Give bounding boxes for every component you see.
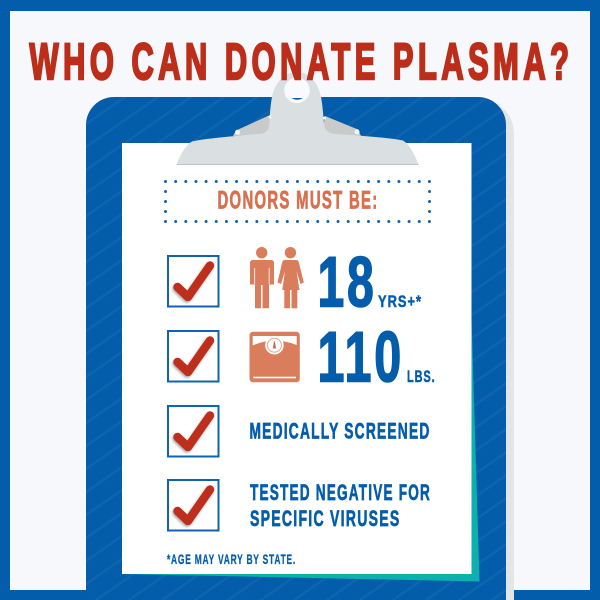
dotted heading box bbox=[166, 182, 430, 222]
checkbox 1 bbox=[168, 256, 218, 306]
clipboard shadow bbox=[496, 104, 514, 600]
text: tested negative: SPECIFIC VIRUSES bbox=[250, 506, 400, 531]
clip base edge bbox=[176, 164, 418, 165]
checkbox 3 bbox=[168, 406, 218, 456]
paper sheet bbox=[122, 143, 472, 574]
footnote: *AGE MAY VARY BY STATE. bbox=[167, 551, 296, 567]
label lbs: LBS. bbox=[407, 368, 436, 386]
clipboard board bbox=[86, 97, 506, 600]
text: tested negative bbox=[250, 480, 431, 531]
number 18: 18 bbox=[318, 243, 376, 322]
icon: scale bbox=[250, 332, 300, 382]
label yrs: YRS+* bbox=[378, 293, 422, 311]
clip body bbox=[176, 72, 418, 164]
icon: man and woman bbox=[250, 247, 304, 308]
clip hinge wings bbox=[233, 115, 361, 136]
text: tested negative: TESTED NEGATIVE FOR bbox=[250, 480, 431, 505]
text: medically screened: MEDICALLY SCREENED bbox=[250, 419, 430, 444]
checkbox 2 bbox=[168, 331, 218, 382]
teal back sheet bbox=[122, 300, 480, 582]
hole board sliver bbox=[292, 98, 303, 100]
number 110: 110 bbox=[318, 318, 404, 397]
clip rivets bbox=[235, 116, 360, 135]
heading: donors must be: DONORS MUST BE: bbox=[218, 186, 378, 214]
checkbox 4 bbox=[168, 480, 218, 530]
clip bbox=[176, 72, 418, 165]
clip hole bbox=[284, 78, 310, 103]
